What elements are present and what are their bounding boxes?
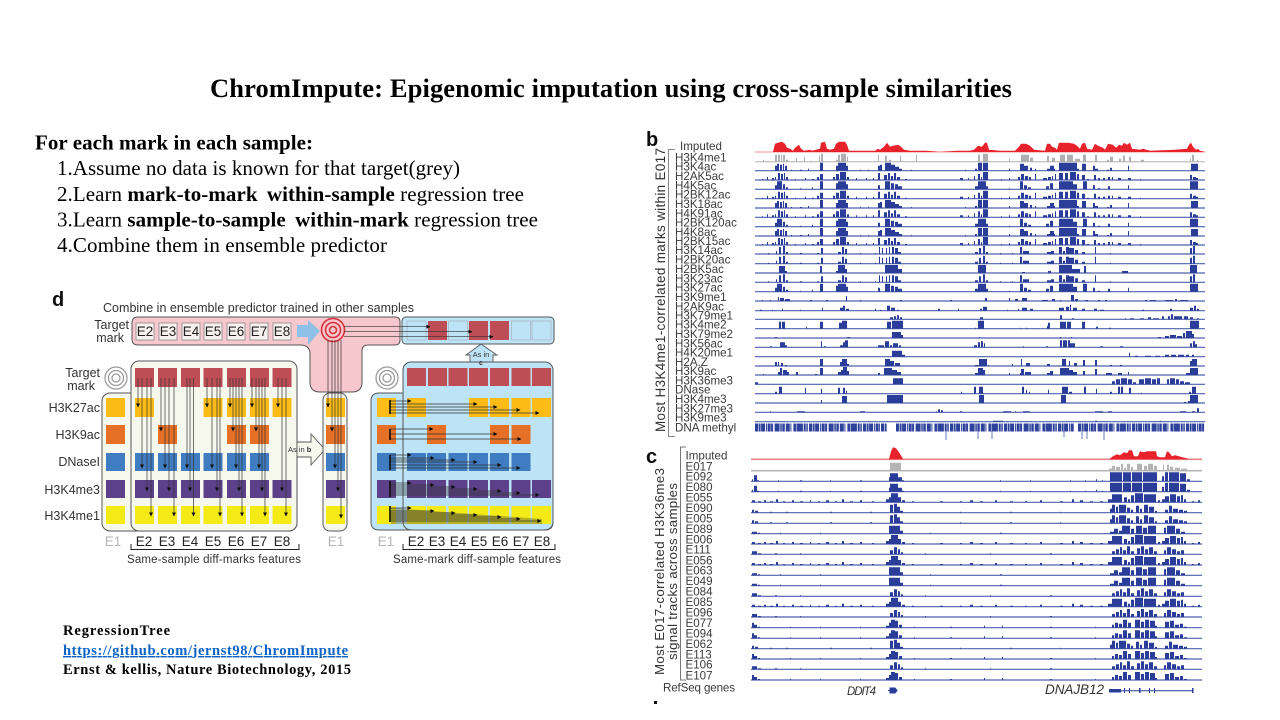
track: H3K79me1: H3K79me1 bbox=[675, 309, 733, 322]
target sample boxes E2-E8: E2 bbox=[137, 324, 153, 339]
track: E080: E080 bbox=[686, 481, 713, 494]
track: H3K9me3: H3K9me3 bbox=[675, 412, 727, 425]
track: E062 bbox=[686, 638, 1202, 651]
sample labels: E2 bbox=[136, 534, 152, 549]
target sample boxes E2-E8: E8 bbox=[274, 324, 290, 339]
track: E106: E106 bbox=[686, 659, 713, 672]
bracket bbox=[403, 544, 555, 550]
track: H4K8ac bbox=[675, 226, 1205, 239]
panel letter d: d bbox=[52, 289, 64, 311]
sample labels: E8 bbox=[274, 534, 290, 549]
references: RegressionTree bbox=[63, 623, 171, 639]
track: H3K4ac: H3K4ac bbox=[675, 161, 716, 174]
track: H2BK12ac bbox=[675, 189, 1205, 202]
vertical axis title: Most E017-correlated H3K36me3 bbox=[652, 468, 667, 675]
sample labels: E7 bbox=[251, 534, 267, 549]
icon: grey concentric target bbox=[105, 367, 127, 389]
track: H3K36me3: H3K36me3 bbox=[675, 374, 733, 387]
right outer box with E1 bbox=[371, 393, 553, 530]
track: H2AK5ac bbox=[675, 170, 1205, 183]
panel b: within-sample tracks bbox=[646, 129, 1205, 440]
row labels: H3K4me3 bbox=[44, 483, 100, 497]
bracket bbox=[680, 447, 686, 680]
track: H3K4ac bbox=[675, 161, 1205, 174]
track: H3K27ac: H3K27ac bbox=[675, 282, 723, 295]
track: E107 bbox=[686, 669, 1202, 682]
icon: grey concentric target bbox=[376, 367, 398, 389]
panel c: across-sample tracks bbox=[646, 446, 1202, 704]
text block: method steps: 1.Assume no data is known for that target(grey) bbox=[57, 156, 460, 180]
track: E049 bbox=[686, 575, 1202, 588]
track: E005: E005 bbox=[686, 513, 713, 526]
track: E089 bbox=[686, 523, 1202, 536]
track: Imputed bbox=[680, 140, 1205, 153]
panel d: ensemble diagram bbox=[44, 289, 561, 566]
track: H3K27me3: H3K27me3 bbox=[675, 402, 733, 415]
track: E006: E006 bbox=[686, 533, 713, 546]
arrows: within-mark horizontal bbox=[390, 400, 541, 522]
track: H2BK120ac: H2BK120ac bbox=[675, 217, 737, 230]
text block: method steps bbox=[35, 130, 538, 257]
track: E090 bbox=[686, 502, 1202, 515]
blue arrow into ensemble bbox=[297, 320, 320, 345]
column squares bbox=[326, 398, 345, 524]
title: ChromImpute: Epigenomic imputation using cross-sample similarities bbox=[210, 73, 1012, 103]
sample labels: E8 bbox=[534, 534, 550, 549]
panel: same-mark diff-sample features bbox=[371, 344, 561, 566]
track: E094: E094 bbox=[686, 628, 713, 641]
track: H3K4me2: H3K4me2 bbox=[675, 319, 727, 332]
row labels bbox=[44, 366, 101, 523]
track: H3K36me3 bbox=[675, 374, 1205, 387]
track: E111: E111 bbox=[686, 544, 711, 557]
H3K9ac row bbox=[106, 425, 269, 444]
H3K27ac row bbox=[377, 398, 551, 417]
track: H3K4me1 bbox=[675, 152, 1205, 165]
track: E084: E084 bbox=[686, 586, 713, 599]
arrow: as in b bbox=[288, 434, 325, 465]
arrows: ensemble down to column bbox=[328, 340, 341, 518]
arrow: as in c bbox=[466, 344, 497, 367]
text block: method steps: 4.Combine them in ensemble predictor bbox=[57, 233, 387, 257]
H3K4me1 row bbox=[377, 506, 551, 524]
track: H3K56ac bbox=[675, 337, 1205, 350]
track: E080 bbox=[686, 481, 1202, 494]
references: Ernst & kellis, Nature Biotechnology, 2015 bbox=[63, 662, 351, 678]
target sample boxes E2-E8: E4 bbox=[183, 324, 200, 339]
row labels: H3K4me1 bbox=[44, 509, 100, 523]
track: E077 bbox=[686, 617, 1202, 630]
sample labels: E6 bbox=[228, 534, 244, 549]
track: H4K91ac: H4K91ac bbox=[675, 207, 723, 220]
arrow: as in c: As in bbox=[473, 350, 489, 359]
track: H3K9ac: H3K9ac bbox=[675, 365, 716, 378]
vertical axis title: Most H3K4me1-correlated marks within E017 bbox=[653, 148, 668, 432]
gene: DNAJB12: DNAJB12 bbox=[1045, 682, 1104, 697]
track: E006 bbox=[686, 533, 1202, 546]
target sample boxes E2-E8 bbox=[136, 323, 291, 340]
track: H3K9ac bbox=[675, 365, 1205, 378]
track: H3K14ac bbox=[675, 244, 1205, 257]
row labels: H3K27ac bbox=[49, 401, 100, 415]
track: H3K18ac: H3K18ac bbox=[675, 198, 723, 211]
track: H3K79me2: H3K79me2 bbox=[675, 328, 733, 341]
DNaseI row bbox=[106, 453, 269, 471]
vertical axis title bbox=[652, 468, 680, 675]
target sample boxes E2-E8: E6 bbox=[228, 324, 244, 339]
left upper box E2-E8 bbox=[131, 361, 297, 531]
track: H3K14ac: H3K14ac bbox=[675, 244, 723, 257]
track: E092 bbox=[686, 471, 1202, 484]
track: E089: E089 bbox=[686, 523, 713, 536]
target sample boxes E2-E8: E7 bbox=[251, 324, 267, 339]
references: https://github.com/jernst98/ChromImpute bbox=[63, 643, 349, 659]
track: Imputed bbox=[686, 447, 1202, 462]
sample labels: E3 bbox=[159, 534, 175, 549]
sample labels bbox=[105, 534, 290, 549]
track: H4K5ac bbox=[675, 179, 1205, 192]
panel letter c: c bbox=[646, 446, 657, 468]
text block: method steps: 2.Learn mark-to-mark within-sample regression tree bbox=[57, 182, 524, 206]
sample labels: E1 bbox=[378, 534, 394, 549]
arrow: as in b: As in b bbox=[288, 445, 312, 454]
track: H4K20me1: H4K20me1 bbox=[675, 347, 733, 360]
DNaseI row bbox=[377, 453, 530, 471]
track: E063 bbox=[686, 565, 1202, 578]
track: E055: E055 bbox=[686, 492, 713, 505]
track: H2A.Z: H2A.Z bbox=[675, 356, 708, 369]
sample labels: E6 bbox=[492, 534, 508, 549]
right upper box E2-E8 bbox=[403, 362, 553, 530]
H3K9ac row bbox=[377, 425, 530, 444]
track: H2BK15ac bbox=[675, 235, 1205, 248]
label: RefSeq genes: RefSeq genes bbox=[663, 682, 735, 695]
track: E106 bbox=[686, 659, 1202, 672]
track: H3K56ac: H3K56ac bbox=[675, 337, 723, 350]
track: E085 bbox=[686, 596, 1202, 609]
target mark row bbox=[135, 368, 292, 387]
text block: method steps: For each mark in each sample: bbox=[35, 130, 313, 154]
track: E084 bbox=[686, 586, 1202, 599]
track: H3K79me1 bbox=[675, 309, 1205, 322]
pink T-shaped ensemble bar bbox=[132, 317, 400, 392]
references bbox=[63, 623, 351, 678]
icon: red concentric target bbox=[322, 318, 344, 342]
left outer box with E1 bbox=[102, 393, 297, 531]
track: E055 bbox=[686, 492, 1202, 505]
track: H3K79me2 bbox=[675, 328, 1205, 341]
track: H2BK20ac bbox=[675, 254, 1205, 267]
track: DNA methyl: DNA methyl bbox=[675, 422, 736, 434]
track: H4K20me1 bbox=[675, 347, 1205, 360]
track: H3K4me3 bbox=[675, 393, 1205, 406]
H3K4me1 row bbox=[106, 506, 292, 524]
track: H2BK12ac: H2BK12ac bbox=[675, 189, 731, 202]
panel: same-sample diff-marks features bbox=[44, 361, 301, 566]
sample labels: E5 bbox=[471, 534, 487, 549]
shaded wedge on H3K4me1 bbox=[391, 508, 542, 524]
caption: same-sample diff-marks features: Same-sample diff-marks features bbox=[127, 554, 301, 566]
track: H2BK15ac: H2BK15ac bbox=[675, 235, 731, 248]
track: H3K23ac bbox=[675, 272, 1205, 285]
gene: DNAJB12 bbox=[1045, 682, 1194, 697]
track: H3K4me3: H3K4me3 bbox=[675, 393, 727, 406]
track: E111 bbox=[686, 544, 1202, 557]
panel: combined E1 column bbox=[323, 340, 347, 549]
track: E056: E056 bbox=[686, 554, 713, 567]
track: Imputed: Imputed bbox=[680, 140, 722, 153]
track: H3K27ac bbox=[675, 282, 1205, 295]
track: E063: E063 bbox=[686, 565, 713, 578]
row labels: H3K9ac bbox=[56, 428, 100, 442]
label: top target mark bbox=[94, 318, 130, 345]
target mark row bbox=[407, 368, 551, 386]
sample labels: E5 bbox=[205, 534, 221, 549]
heading: combine in ensemble predictor: Combine in ensemble predictor trained in other samples bbox=[103, 301, 414, 315]
track: H2AK9ac bbox=[675, 301, 1205, 314]
track: DNA methyl bbox=[675, 422, 1205, 440]
arrow: as in c: c bbox=[479, 360, 483, 367]
track: H4K91ac bbox=[675, 207, 1205, 220]
track: H2BK5ac: H2BK5ac bbox=[675, 263, 724, 276]
track: E062: E062 bbox=[686, 638, 713, 651]
text block: method steps: 3.Learn sample-to-sample within-mark regression tree bbox=[57, 208, 538, 232]
track: DNase: DNase bbox=[675, 384, 710, 397]
row labels: DNaseI bbox=[58, 455, 100, 469]
H3K4me3 row bbox=[106, 480, 292, 498]
track: E096: E096 bbox=[686, 606, 713, 619]
vertical axis title: signal tracks across samples bbox=[665, 483, 680, 660]
track: H2BK20ac: H2BK20ac bbox=[675, 254, 731, 267]
target sample boxes E2-E8: E5 bbox=[205, 324, 221, 339]
track: Imputed: Imputed bbox=[686, 449, 727, 462]
track: E017: E017 bbox=[686, 461, 713, 474]
track: E090: E090 bbox=[686, 502, 713, 515]
bracket bbox=[668, 150, 675, 436]
track: H4K8ac: H4K8ac bbox=[675, 226, 716, 239]
track: DNase bbox=[675, 384, 1205, 397]
track: E049: E049 bbox=[686, 575, 713, 588]
bracket bbox=[131, 544, 299, 550]
track: E113: E113 bbox=[686, 648, 712, 661]
blue output bar bbox=[402, 317, 554, 344]
label: top target mark: mark bbox=[96, 331, 125, 345]
gene: DDIT4: DDIT4 bbox=[847, 686, 876, 698]
arrows: within-sample vertical bbox=[138, 378, 286, 516]
gene: DDIT4 bbox=[847, 686, 897, 698]
track: E005 bbox=[686, 513, 1202, 526]
target sample boxes E2-E8: E3 bbox=[160, 324, 176, 339]
column box bbox=[323, 393, 347, 531]
track: H2BK5ac bbox=[675, 263, 1205, 276]
track: H3K9me1 bbox=[675, 291, 1205, 304]
sample labels: E3 bbox=[429, 534, 445, 549]
track: H3K18ac bbox=[675, 198, 1205, 211]
track: E077: E077 bbox=[686, 617, 713, 630]
sample labels: E2 bbox=[408, 534, 424, 549]
sample labels: E4 bbox=[182, 534, 199, 549]
track: E107: E107 bbox=[686, 669, 713, 682]
H3K27ac row bbox=[106, 398, 292, 417]
track: H4K5ac: H4K5ac bbox=[675, 179, 716, 192]
label: top target mark: Target bbox=[94, 318, 130, 332]
track: H3K4me1: H3K4me1 bbox=[675, 152, 727, 165]
row labels: mark bbox=[67, 379, 96, 393]
fragment mark at bottom bbox=[654, 701, 657, 704]
track: E096 bbox=[686, 606, 1202, 619]
sample labels: E1 bbox=[105, 534, 121, 549]
track: E056 bbox=[686, 554, 1202, 567]
row labels: Target bbox=[65, 366, 101, 380]
output bar squares bbox=[407, 321, 551, 340]
caption: same-mark diff-sample features: Same-mark diff-sample features bbox=[393, 554, 561, 566]
track: H3K27me3 bbox=[675, 402, 1205, 415]
track: H2A.Z bbox=[675, 356, 1205, 369]
track: E085: E085 bbox=[686, 596, 713, 609]
track: H3K9me1: H3K9me1 bbox=[675, 291, 727, 304]
track: H2BK120ac bbox=[675, 217, 1205, 230]
track: E113 bbox=[686, 648, 1202, 661]
track: E094 bbox=[686, 628, 1202, 641]
track: H3K23ac: H3K23ac bbox=[675, 272, 723, 285]
track: H2AK5ac: H2AK5ac bbox=[675, 170, 724, 183]
track: E092: E092 bbox=[686, 471, 713, 484]
label E1: E1 bbox=[328, 534, 344, 549]
track: H3K4me2 bbox=[675, 319, 1205, 332]
H3K4me3 row bbox=[377, 480, 551, 498]
panel letter b: b bbox=[646, 129, 658, 151]
sample labels bbox=[378, 534, 550, 549]
track: H2AK9ac: H2AK9ac bbox=[675, 301, 724, 314]
arrows: ensemble to output bbox=[344, 327, 493, 337]
sample labels: E7 bbox=[513, 534, 529, 549]
sample labels: E4 bbox=[450, 534, 467, 549]
track: E017 bbox=[686, 461, 1202, 474]
